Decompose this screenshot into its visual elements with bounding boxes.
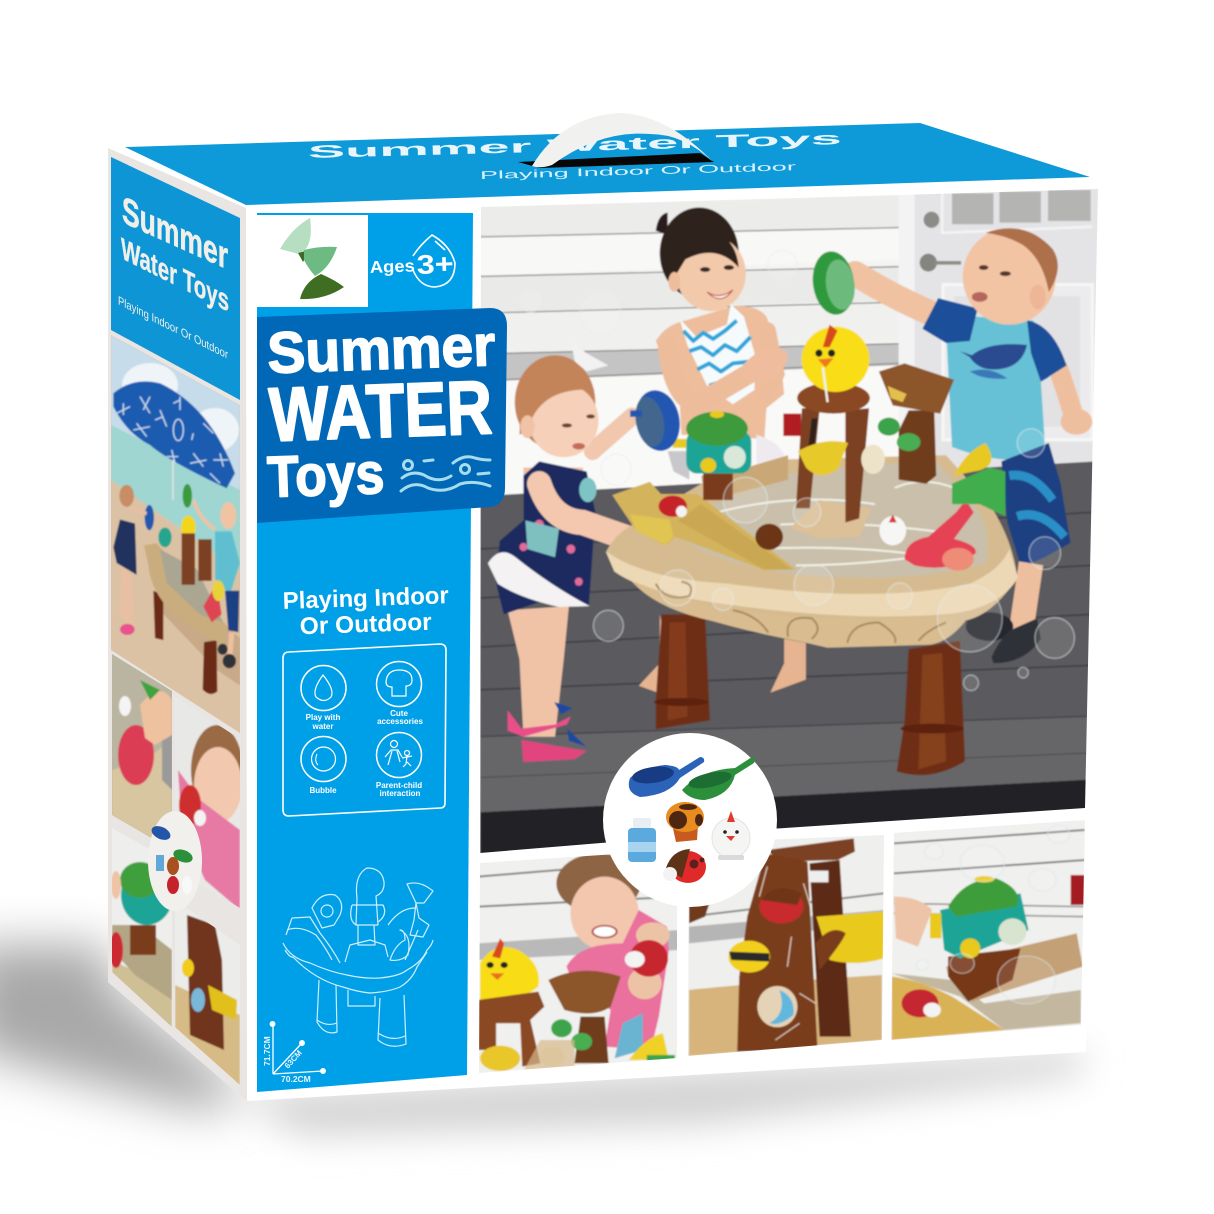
box shadow (0, 945, 1085, 1135)
brown bucket tower (861, 363, 954, 484)
slide (612, 482, 796, 570)
bucket (407, 883, 433, 903)
bottom photo 2: tower detail (688, 835, 884, 1056)
line drawing of table (283, 868, 433, 1046)
blue scoop (629, 757, 704, 797)
bottom photo 1: laughing child (479, 854, 677, 1073)
baby girl (487, 350, 637, 763)
feature: play with water: water (312, 722, 333, 731)
small yellow bowl (798, 441, 848, 475)
feature: bubble (301, 736, 346, 795)
boy (855, 228, 1092, 663)
swimsuit ruffle (488, 552, 590, 607)
side title: Summer (122, 189, 228, 278)
green and yellow toys (952, 443, 1005, 516)
title panel (257, 308, 507, 523)
top face title: Summer Water Toys (308, 128, 842, 162)
title text: Summer (266, 313, 496, 386)
wall siding (480, 226, 900, 494)
feature: bubble: Bubble (309, 786, 337, 795)
feature: cute accessories: Cute (390, 709, 408, 718)
accessories circle (603, 733, 777, 907)
logo patch (250, 215, 368, 307)
feature: parent-child interaction: interaction (380, 789, 421, 798)
carrying handle (518, 113, 714, 168)
side photo: beach scene (111, 335, 240, 733)
side title: Playing Indoor Or Outdoor (118, 293, 229, 362)
striped swimsuit top (679, 304, 755, 404)
feature: parent-child interaction (376, 732, 422, 798)
title text (266, 313, 496, 510)
dimensions: 70.2CM (281, 1074, 311, 1084)
green scoop (812, 250, 856, 316)
feature: play with water: Play with (306, 713, 340, 722)
title text: WATER (268, 365, 493, 458)
feature: cute accessories: accessories (377, 717, 423, 726)
table basin outline (283, 940, 433, 978)
age badge: Ages (369, 256, 415, 277)
features box (283, 644, 446, 816)
door (916, 189, 1098, 466)
beach umbrella (113, 381, 235, 500)
box body (108, 120, 1102, 1101)
dimensions: 63CM (283, 1048, 304, 1070)
side inset: smiling child (178, 724, 240, 908)
boy shorts (1001, 443, 1071, 567)
side title: Water Toys (121, 231, 229, 319)
title text: Toys (266, 441, 385, 510)
bottom photo 3: camera toy detail (888, 820, 1088, 1045)
table legs (317, 980, 337, 1033)
icon: water drop outline (413, 235, 455, 287)
whale print (960, 344, 1027, 370)
ladybug (659, 496, 687, 517)
tower and chick (356, 868, 384, 925)
icon: water waves (401, 457, 490, 491)
green camera toy (673, 411, 788, 500)
soap bubbles (520, 250, 1074, 691)
deck (480, 461, 1096, 859)
side title (118, 189, 229, 362)
age badge: 3+ (416, 249, 454, 280)
dimensions (262, 1022, 325, 1084)
top face of box (125, 113, 1090, 205)
water (678, 459, 988, 578)
red swirl toy (904, 503, 976, 571)
side panel of box (105, 157, 245, 1090)
main photo (475, 185, 1106, 865)
table legs (654, 614, 965, 775)
bubble bottle (628, 818, 656, 862)
side inset: green camera toy (112, 828, 172, 1027)
pink shoes (508, 710, 571, 737)
subtitle: Or Outdoor (299, 609, 432, 640)
chick toy (879, 514, 906, 545)
ladybug (663, 849, 706, 883)
yellow chicken (802, 327, 869, 392)
logo: three leaves (280, 218, 344, 299)
mushroom (666, 802, 704, 842)
white chicken (712, 811, 750, 860)
feature: cute accessories (376, 662, 423, 726)
side inset: red swirl (112, 654, 172, 838)
blue scoop (629, 389, 681, 452)
mini kids and table (113, 484, 240, 694)
side inset: accessories circle (148, 811, 202, 911)
dimensions: 71.7CM (262, 1036, 272, 1066)
age badge (369, 235, 455, 287)
splash bowl (390, 930, 409, 960)
side inset: brown tower (175, 914, 240, 1085)
blue front column (257, 213, 473, 1092)
camera toy (312, 895, 342, 928)
subtitle: Playing Indoor (282, 582, 449, 615)
tower (783, 325, 871, 539)
feature: play with water (301, 666, 346, 731)
subtitle (282, 582, 449, 640)
center girl (639, 208, 806, 693)
table basin (606, 455, 1018, 648)
feature: parent-child interaction: Parent-child (376, 781, 422, 790)
green scoop (682, 757, 755, 800)
top face subtitle: Playing Indoor Or Outdoor (480, 160, 796, 182)
mushroom toy (755, 524, 783, 550)
